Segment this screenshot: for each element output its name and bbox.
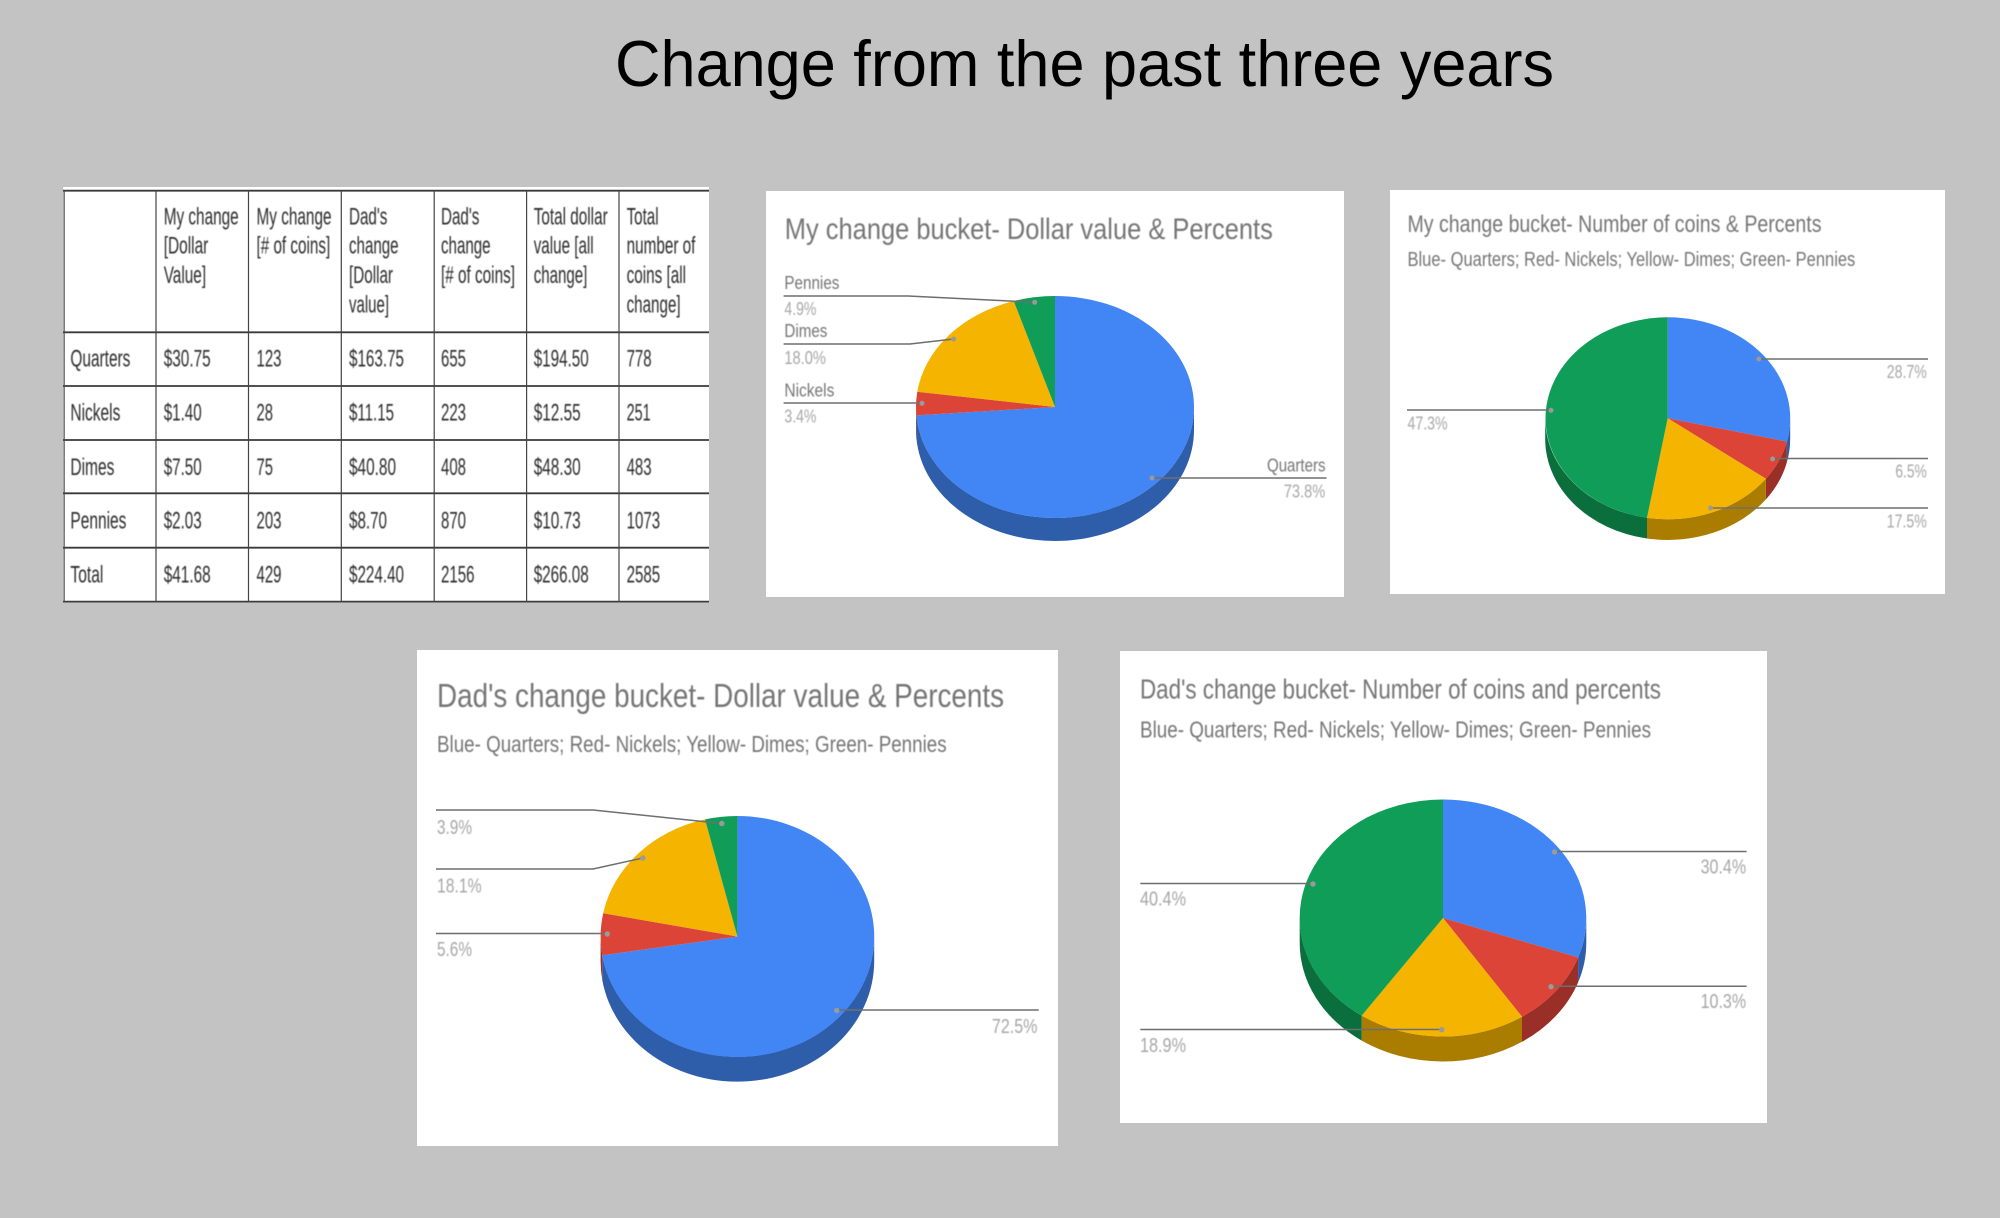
callout: nickels 3.4%: 3.4% [784, 407, 816, 427]
callout: 18.1%: 18.1% [437, 875, 482, 898]
callout: 47.3% [1407, 408, 1554, 433]
callout: dimes 18.0%: 18.0% [784, 348, 826, 368]
table row: quarters: $163.75 [349, 346, 404, 373]
callout: nickels 3.4%: Nickels [784, 380, 834, 401]
table row: dimes: 75 [256, 454, 273, 481]
callout: pennies 4.9%: 4.9% [784, 299, 816, 319]
callout: 17.5% [1708, 506, 1928, 531]
table row: nickels: $12.55 [534, 400, 581, 427]
table row: nickels: Nickels [70, 400, 120, 427]
table row: total: 2585 [627, 562, 660, 589]
panel: data table [63, 187, 709, 603]
callout: 5.6%: 5.6% [437, 938, 472, 961]
panel: dad's change bucket, dollar value [417, 650, 1058, 1146]
table row: total: $41.68 [164, 562, 211, 589]
table header row [164, 203, 696, 318]
table row: dimes [70, 454, 652, 481]
callout: pennies 4.9% [784, 272, 1037, 319]
table row: total [70, 562, 660, 589]
chart title: my change dollar value: My change bucket- Dollar value & Percents [785, 213, 1273, 246]
table row: total: 429 [256, 562, 282, 589]
table row: dimes: $7.50 [164, 454, 202, 481]
table header row: change [349, 233, 399, 260]
table header row: [# of coins] [256, 233, 330, 260]
table header row: Total [627, 203, 659, 230]
table row: dimes: $40.80 [349, 454, 396, 481]
pie chart: my change dollar value [916, 296, 1194, 541]
colour key subtitle: Blue- Quarters; Red- Nickels; Yellow- Dimes; Green- Pennies [437, 731, 947, 757]
colour key subtitle: Blue- Quarters; Red- Nickels; Yellow- Dimes; Green- Pennies [1408, 248, 1855, 271]
callout: 5.6% [436, 931, 610, 961]
chart title: dad's dollar value: Dad's change bucket- Dollar value & Percents [437, 677, 1004, 714]
table header row: Dad's [441, 203, 479, 230]
table row: total: Total [70, 562, 103, 589]
pie chart: my change number of coins [1545, 317, 1790, 540]
table row: pennies: Pennies [70, 507, 126, 534]
callout: 47.3%: 47.3% [1408, 413, 1448, 433]
table row: quarters: Quarters [70, 346, 130, 373]
callout: 10.3% [1548, 984, 1747, 1013]
callout: 72.5%: 72.5% [992, 1015, 1037, 1038]
table header row: coins [all [627, 262, 686, 289]
callout: 28.7%: 28.7% [1887, 362, 1927, 382]
table header row: change [441, 233, 491, 260]
table row: pennies: $10.73 [534, 507, 581, 534]
callout: 6.5%: 6.5% [1895, 462, 1927, 482]
callout: 10.3%: 10.3% [1701, 990, 1746, 1013]
table row: total: 2156 [441, 562, 474, 589]
table row: pennies: 870 [441, 507, 466, 534]
table row: nickels: $11.15 [349, 400, 394, 427]
callout: 3.9%: 3.9% [437, 816, 472, 839]
colour key subtitle: Blue- Quarters; Red- Nickels; Yellow- Dimes; Green- Pennies [1140, 716, 1651, 742]
panel: my change bucket, number of coins [1390, 190, 1945, 594]
pie chart: dad's number of coins [1300, 800, 1586, 1061]
callout: 17.5%: 17.5% [1887, 511, 1927, 531]
callout: quarters 73.8%: Quarters [1267, 455, 1326, 476]
table row: quarters: $194.50 [534, 346, 589, 373]
table row: nickels: 28 [256, 400, 273, 427]
table header row: Dad's [349, 203, 387, 230]
callout: 30.4% [1552, 849, 1747, 878]
table row: nickels: $1.40 [164, 400, 202, 427]
table row: nickels [70, 400, 651, 427]
table row: nickels: 251 [627, 400, 651, 427]
table header row: My change [256, 203, 332, 230]
callout: nickels 3.4% [784, 380, 924, 427]
callout: 40.4%: 40.4% [1140, 887, 1186, 910]
callout: 40.4% [1140, 881, 1316, 910]
table header row: value [all [534, 233, 594, 260]
table header row: [Dollar [164, 233, 208, 260]
table row: quarters: $30.75 [164, 346, 211, 373]
table row: total: $266.08 [534, 562, 589, 589]
table header row: change] [534, 262, 587, 289]
callout: quarters 73.8% [1150, 455, 1326, 501]
table row: dimes: 408 [441, 454, 466, 481]
callout: 30.4%: 30.4% [1701, 856, 1746, 878]
table header row: change] [627, 291, 681, 318]
callout: 72.5% [834, 1008, 1039, 1038]
table row: pennies: 1073 [627, 507, 660, 534]
table row: quarters: 778 [627, 346, 652, 373]
callout: dimes 18.0%: Dimes [784, 320, 827, 341]
table row: total: $224.40 [349, 562, 404, 589]
table header row: value] [349, 291, 389, 318]
table row: pennies: $8.70 [349, 507, 387, 534]
table row: dimes: $48.30 [534, 454, 581, 481]
table header row: Total dollar [534, 203, 608, 230]
table row: quarters: 655 [441, 346, 466, 373]
callout: 18.9% [1140, 1027, 1444, 1057]
table header row: [Dollar [349, 262, 393, 289]
table header row: number of [627, 233, 696, 260]
callout: 28.7% [1756, 356, 1928, 382]
pie chart: dad's dollar value [601, 816, 874, 1082]
table row: pennies [70, 507, 660, 534]
table row: quarters: 123 [256, 346, 282, 373]
callout: 18.1% [436, 855, 646, 898]
table row: nickels: 223 [441, 400, 466, 427]
callout: 3.9% [436, 810, 724, 839]
chart title: dad's number of coins: Dad's change bucket- Number of coins and percents [1140, 674, 1661, 704]
table row: quarters [70, 346, 652, 373]
table row: dimes: 483 [627, 454, 652, 481]
title: Change from the past three years [615, 27, 1554, 100]
chart title: my change number of coins: My change bucket- Number of coins & Percents [1408, 211, 1822, 238]
table row: pennies: 203 [256, 507, 282, 534]
table header row: My change [164, 203, 239, 230]
callout: 18.9%: 18.9% [1140, 1034, 1186, 1057]
callout: quarters 73.8%: 73.8% [1284, 481, 1325, 501]
table row: dimes: Dimes [70, 454, 114, 481]
table header row: Value] [164, 262, 206, 289]
callout: 6.5% [1770, 456, 1928, 482]
table row: pennies: $2.03 [164, 507, 202, 534]
callout: pennies 4.9%: Pennies [784, 272, 839, 293]
callout: dimes 18.0% [784, 320, 956, 368]
table header row: [# of coins] [441, 262, 515, 289]
panel: dad's change bucket, number of coins [1120, 651, 1767, 1123]
panel: my change bucket, dollar value [766, 191, 1344, 597]
